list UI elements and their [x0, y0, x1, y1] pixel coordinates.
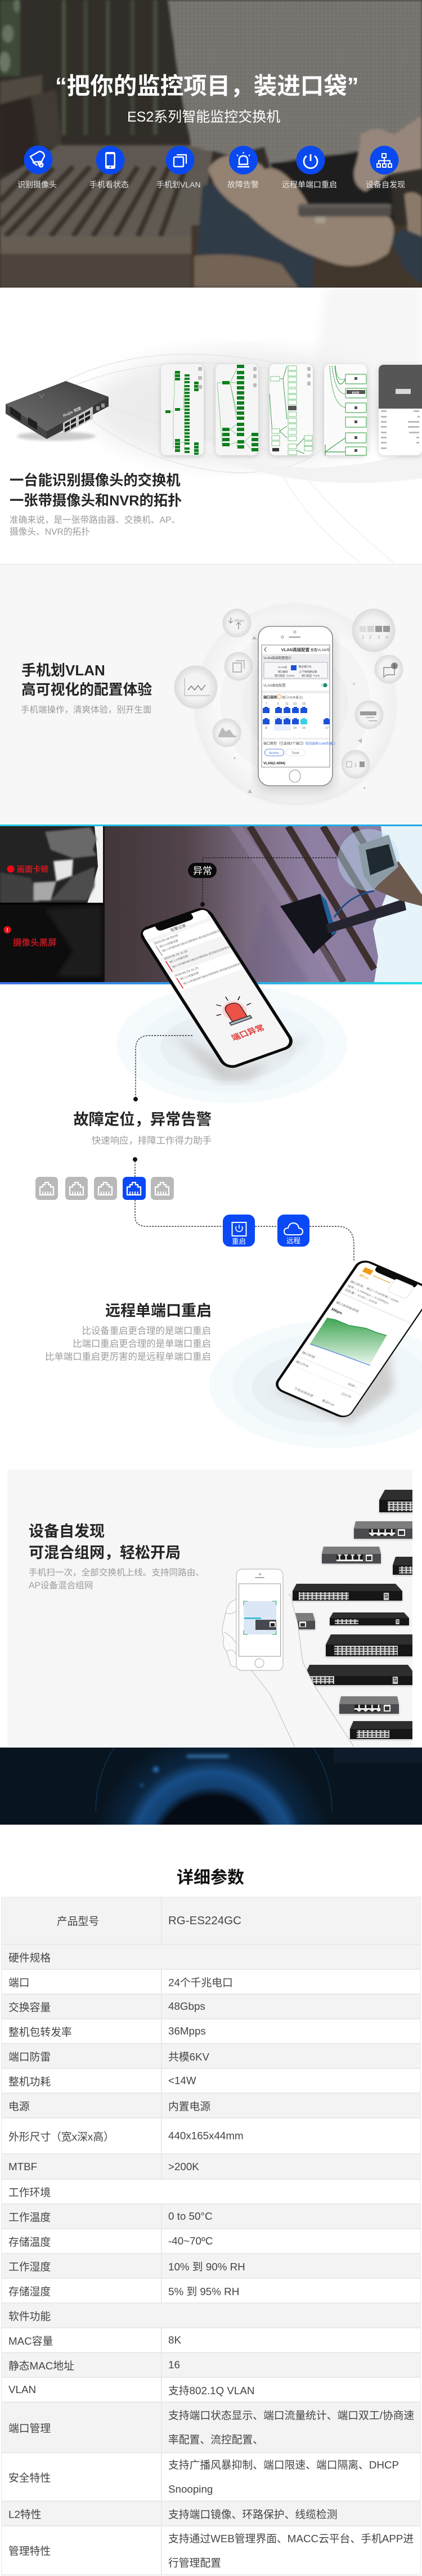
- phone: alarm records: 端口14流量告警: [179, 971, 200, 981]
- phone: alarm records: 2019-05-23 11:15: [163, 949, 188, 961]
- row: ports: 24个千兆电口: [168, 1977, 233, 1988]
- phone with VLAN config screen: VLAN高级配置图示: [263, 656, 291, 660]
- switch product: Ruijie 锐捷: [62, 405, 82, 418]
- phone with VLAN config screen: 14: [293, 727, 297, 730]
- phone: alarm records: 端口18流量告警: [159, 939, 179, 949]
- phone: alarm records: 端口1终端持续可能会间断掉线,请设备及连接情况。: [182, 961, 244, 985]
- row: working temperature: 0 to 50°C: [168, 2210, 213, 2222]
- row: software section: [1, 2303, 421, 2328]
- rings under phone: [0, 984, 422, 1168]
- text: VLAN description: 手机端操作，清爽体验，别开生面: [21, 705, 152, 715]
- row: storage temperature: [1, 2229, 421, 2254]
- phone: port detail: 重启PoE: [321, 1399, 336, 1407]
- row: power use: <14W: [168, 2075, 196, 2086]
- screen: topology phone 1: [161, 364, 204, 455]
- switch A: [379, 1490, 416, 1512]
- alert icon: [7, 866, 15, 872]
- row: model: [1, 1897, 421, 1945]
- phone with VLAN config screen: [258, 626, 335, 786]
- row: forwarding: 整机包转发率: [8, 2026, 72, 2037]
- row: hardware section: [1, 1945, 421, 1970]
- row: power supply: 电源: [8, 2100, 30, 2112]
- bubble: line chart: [174, 666, 217, 709]
- dashed connectors: [135, 1161, 354, 1262]
- bubble: ports: 3: [378, 635, 380, 640]
- row: security: 支持广播风暴抑制、端口限速、端口隔离、DHCP Snooping: [168, 2459, 399, 2495]
- row: L2: [1, 2501, 421, 2526]
- row: capacity: 交换容量: [8, 2001, 51, 2013]
- text: remote restart description: [45, 1326, 211, 1362]
- phone with VLAN config screen: 11: [285, 702, 289, 706]
- heading: VLAN line 1: 手机划VLAN: [21, 662, 105, 679]
- phone: port detail: 修改 ›: [347, 1382, 358, 1389]
- row: VLAN: VLAN: [8, 2384, 36, 2395]
- row: working temperature: 工作温度: [8, 2211, 51, 2223]
- switch J: [339, 1696, 399, 1714]
- row: static MAC: 静态MAC地址: [8, 2359, 74, 2372]
- badge: 异常: [188, 863, 217, 878]
- bubble: message: [375, 655, 403, 683]
- phone with VLAN config screen: 8: [265, 727, 267, 730]
- icon: alarm beacon: [208, 991, 259, 1028]
- heading: fault locate: 故障定位，异常告警: [73, 1110, 212, 1128]
- row: MAC capacity: [1, 2328, 421, 2353]
- phone: alarm records: 端口14流量告警: [168, 954, 189, 964]
- phone with VLAN config screen: 12: [285, 727, 289, 730]
- panel: fault alert section artwork: 画面卡顿: [17, 864, 48, 873]
- bubble: wave: [213, 719, 241, 747]
- row: capacity: 48Gbps: [168, 2000, 205, 2012]
- phone: port detail: 端口权限: [301, 1350, 316, 1359]
- bubble: ports: 2: [369, 635, 372, 640]
- row: storage humidity: [1, 2278, 421, 2304]
- bubble: speed arrows: Mbps: [235, 619, 245, 623]
- row: static MAC: [1, 2353, 421, 2378]
- switch I: [304, 1665, 416, 1685]
- row: security: [1, 2453, 421, 2502]
- panel: fault alert section artwork: [0, 825, 422, 1103]
- panel: fault alert section artwork: !: [6, 928, 8, 934]
- row: port management: 支持端口状态显示、端口流量统计、端口双工/协商速率配置、流控配置、: [168, 2409, 414, 2445]
- row: environment section: [1, 2179, 421, 2205]
- row: forwarding: [1, 2019, 421, 2044]
- phone: port detail: [272, 1257, 422, 1421]
- panel: fault alert section artwork: 摄像头黑屏: [13, 937, 57, 948]
- phone with VLAN config screen: 9: [277, 702, 279, 706]
- row: management: 管理特性: [8, 2545, 51, 2557]
- bubble: pages: [225, 652, 253, 680]
- phone with VLAN config screen: 取消选择VLAN的端口: [306, 741, 335, 746]
- text: remote restart description: 比单端口重启更厉害的是远程单端口重启: [45, 1352, 211, 1362]
- phone with VLAN config screen: 端口类型: Access: [275, 674, 295, 678]
- heading: remote restart: 远程单端口重启: [105, 1302, 212, 1319]
- row: port management: [1, 2402, 421, 2453]
- phone with VLAN config screen: Access: [269, 752, 279, 755]
- heading: discovery line 1: 设备自发现: [29, 1523, 105, 1540]
- row: MAC capacity: MAC容量: [8, 2335, 53, 2347]
- subtitle: hero: ES2系列智能监控交换机: [127, 109, 280, 125]
- phone: port detail: 速率 ↑ 1.09Mbps ↓ 0.03Mbps: [347, 1284, 390, 1305]
- panel: hero photo background: [0, 0, 422, 288]
- row: MAC capacity: 8K: [168, 2334, 181, 2346]
- phone with VLAN config screen: 端口14(未备注): [282, 695, 303, 700]
- bubble: list: [355, 701, 383, 729]
- row: L2: L2特性: [8, 2508, 41, 2520]
- screen: device detail phone 5: [379, 364, 422, 455]
- screen: topology phone 4: [324, 364, 367, 455]
- row: storage humidity: 存储湿度: [8, 2285, 51, 2297]
- row: hardware section: 硬件规格: [8, 1952, 51, 1963]
- bubble: speed arrows: [223, 609, 251, 637]
- panel: remote restart artwork: [35, 1157, 422, 1448]
- button: 重启: 重启: [232, 1237, 246, 1246]
- heading: VLAN line 2: 高可视化的配置体验: [21, 682, 152, 698]
- phone with VLAN config screen: 17: [325, 727, 329, 730]
- phone with VLAN config screen: VLAN高级配置: [263, 683, 286, 688]
- heading: discovery line 2: 可混合组网，轻松开局: [29, 1544, 181, 1561]
- row: working humidity: 10% 到 90% RH: [168, 2260, 245, 2273]
- switch E: [293, 1584, 402, 1601]
- row: VLAN: [1, 2377, 421, 2403]
- screen: topology phone 3: [270, 364, 313, 455]
- switch product: [6, 381, 109, 441]
- bubble: stepper: 1: [354, 762, 357, 768]
- bubble: ports: [352, 609, 395, 652]
- icon: topology: [370, 146, 398, 174]
- row: power use: [1, 2068, 421, 2094]
- row: dimensions: 外形尺寸（宽x深x高）: [8, 2131, 114, 2142]
- icon: alarm: [229, 146, 258, 174]
- row: surge: 端口防雷: [8, 2051, 51, 2062]
- phone: alarm records: [136, 905, 297, 1071]
- table: parameters: [1, 1897, 421, 2575]
- row: model: 产品型号: [57, 1915, 99, 1927]
- panel: dark tech banner: [0, 1748, 422, 1825]
- row: MTBF: MTBF: [8, 2160, 37, 2172]
- port row: [35, 1177, 174, 1200]
- bubble: stepper: [342, 750, 370, 778]
- row: power supply: 内置电源: [168, 2100, 210, 2112]
- heading: parameters: 详细参数: [177, 1869, 244, 1887]
- row: VLAN: 支持802.1Q VLAN: [168, 2384, 254, 2396]
- panel: VLAN section artwork: [0, 564, 422, 808]
- phone: alarm records: 端口1终端持续可能会间断掉线,请设备及连接情况。: [172, 944, 233, 969]
- row: software section: 软件功能: [8, 2310, 51, 2322]
- dashed connector: camera to phone: [203, 858, 336, 903]
- bubble: message: 1: [393, 664, 396, 669]
- row: dimensions: [1, 2118, 421, 2154]
- label: 手机看状态: 手机看状态: [89, 180, 129, 189]
- row: forwarding: 36Mpps: [168, 2025, 206, 2037]
- switch C: [322, 1547, 381, 1563]
- heading: topology line 2: 一张带摄像头和NVR的拓扑: [10, 493, 182, 509]
- row: working humidity: 工作湿度: [8, 2260, 51, 2273]
- row: port management: 端口管理: [8, 2422, 51, 2434]
- phone with VLAN config screen: 上/下联线路设备: [299, 670, 317, 674]
- panel: device discovery artwork: [7, 1470, 412, 1747]
- phone with VLAN config screen: 16: [302, 727, 306, 730]
- glitch tile: 画面卡顿: [0, 826, 103, 903]
- phone with VLAN config screen: 15: [302, 702, 306, 706]
- row: ports: 端口: [8, 1977, 30, 1988]
- dashed connector: phone to port row: [136, 1036, 192, 1099]
- hand outline: [222, 1594, 354, 1747]
- phone with VLAN config screen: 端口类型: Trunk: [302, 674, 320, 678]
- bubble: ports: 4: [385, 635, 388, 640]
- phone: port detail: 端口状态：电口 / PoE供电 / 100M: [349, 1279, 399, 1303]
- row: working humidity: [1, 2254, 421, 2279]
- concentric rings: [196, 604, 395, 803]
- row: MTBF: >200K: [168, 2160, 199, 2172]
- row: surge: [1, 2044, 421, 2069]
- label: 远程单端口重启: 远程单端口重启: [282, 180, 337, 189]
- icon: camera: [24, 145, 53, 174]
- panel: topology section artwork: [6, 293, 422, 563]
- dot: [133, 1097, 138, 1101]
- row: storage temperature: -40~70ºC: [168, 2235, 213, 2247]
- screen: topology phone 4: NVR: [352, 392, 360, 395]
- row: management: 支持通过WEB管理界面、MACC云平台、手机APP进行管理配置: [168, 2533, 414, 2569]
- phone: alarm records: 端口异常: [230, 1023, 266, 1042]
- phone: port detail: 端口速率趋势图: [335, 1300, 360, 1314]
- phone with VLAN config screen: VLAN号: [278, 666, 288, 669]
- label: 手机划VLAN: 手机划VLAN: [156, 180, 201, 189]
- text: remote restart description: 比设备重启更合理的是端口重启: [82, 1326, 211, 1336]
- switch K: [350, 1721, 416, 1739]
- label: 识别摄像头: 识别摄像头: [17, 180, 57, 189]
- label: 设备自发现: 设备自发现: [366, 180, 405, 189]
- screen: topology phone 2: [216, 364, 258, 455]
- row: security: 安全特性: [8, 2472, 51, 2483]
- rings under phone: [209, 1321, 422, 1448]
- phone: port detail: 流包量 ↑ 919G ↓ 50GB: [344, 1288, 378, 1305]
- title: hero headline: “把你的监控项目，装进口袋”: [55, 73, 359, 99]
- phone: port detail: 下线信息检查: [293, 1386, 315, 1398]
- glitch tile: 摄像头黑屏: [0, 904, 104, 982]
- phone with VLAN config screen: 13: [293, 702, 297, 706]
- camera on wall: [280, 829, 422, 954]
- text: topology description: 摄像头、NVR的拓扑: [10, 527, 90, 537]
- text: topology description: [10, 515, 180, 537]
- row: surge: 共模6KV: [168, 2051, 209, 2062]
- row: power supply: [1, 2093, 421, 2118]
- bubble: ports: 1: [362, 635, 365, 640]
- switch D: [393, 1557, 416, 1575]
- phone with VLAN config screen: 端口选择:: [263, 695, 278, 700]
- label: 故障告警: 故障告警: [227, 180, 259, 189]
- phone: port detail: Mbps: [330, 1307, 343, 1315]
- phone with VLAN config screen: 端口编号: [278, 670, 288, 674]
- phone with VLAN config screen: 端口类型（已选择3个端口）: [263, 741, 306, 746]
- phone: port detail: 端口4: [358, 1273, 370, 1280]
- decorative triangles: [234, 636, 366, 793]
- heading: topology line 1: 一台能识别摄像头的交换机: [10, 473, 181, 489]
- button: 远程: 远程: [286, 1237, 300, 1245]
- dot: [200, 902, 205, 907]
- phone with VLAN config screen: 10: [276, 727, 280, 730]
- text: fault locate description: 快速响应，排障工作得力助手: [92, 1136, 212, 1146]
- row: MTBF: [1, 2154, 421, 2180]
- text: discovery description: AP设备混合组网: [29, 1580, 93, 1591]
- phone: alarm records: 2019-05-23 11:15: [174, 966, 199, 978]
- phone: port detail: 已打开: [340, 1392, 352, 1399]
- phone with VLAN config screen: 7: [265, 702, 267, 706]
- row: storage humidity: 5% 到 95% RH: [168, 2285, 239, 2297]
- row: working temperature: [1, 2204, 421, 2229]
- phone: alarm records: 2019-05-24 03:59: [154, 934, 179, 946]
- row: management: [1, 2526, 421, 2575]
- row: static MAC: 16: [168, 2359, 180, 2371]
- row: model: RG-ES224GC: [168, 1914, 241, 1927]
- text: discovery description: [29, 1568, 204, 1591]
- switch B: [354, 1521, 416, 1539]
- dot: [133, 1157, 137, 1162]
- phone with VLAN config screen: 聚合端口号: [299, 665, 312, 669]
- phone: alarm records: 端口1终端持续可能会间断掉线,请设备及连接情况。: [161, 928, 223, 953]
- phone scanning a switch: [236, 1569, 283, 1670]
- phone with VLAN config screen: VLAN(1-4094): [263, 762, 285, 765]
- icon: VLAN pages: [165, 146, 195, 174]
- switch H: [326, 1634, 416, 1656]
- row: dimensions: 440x165x44mm: [168, 2130, 244, 2142]
- text: topology description: 准确来说，是一张带路由器、交换机、AP、: [10, 516, 180, 525]
- accent lines: [0, 825, 422, 984]
- icon: power: [296, 146, 325, 174]
- switch G: [330, 1612, 409, 1625]
- badge: 异常: 异常: [193, 866, 212, 876]
- row: power use: 整机功耗: [8, 2076, 51, 2087]
- icon: phone: [96, 146, 125, 174]
- text: discovery description: 手机扫一次，全部交换机上线。支持同路由、: [29, 1568, 204, 1578]
- row: ports: [1, 1969, 421, 1995]
- row: L2: 支持端口镜像、环路保护、线缆检测: [168, 2508, 338, 2520]
- phone: port detail: 端口开关: [295, 1360, 310, 1368]
- phone with VLAN config screen: 查看VLAN号: [311, 648, 330, 652]
- phone: alarm records: 告警记录: [169, 923, 187, 933]
- button: 重启: [223, 1215, 255, 1247]
- phone with VLAN config screen: Trunk: [291, 752, 299, 755]
- row: capacity: [1, 1994, 421, 2019]
- text: remote restart description: 比端口重启更合理的是单端口重启: [73, 1339, 211, 1349]
- row: storage temperature: 存储温度: [8, 2235, 51, 2248]
- phone with VLAN config screen: VLAN高级配置: [281, 647, 310, 652]
- button: 远程: [277, 1215, 309, 1247]
- icons: hero feature row: [24, 145, 398, 174]
- decorative swoosh background: [62, 288, 422, 563]
- switch F: [295, 1613, 315, 1629]
- row: environment section: 工作环境: [8, 2186, 51, 2198]
